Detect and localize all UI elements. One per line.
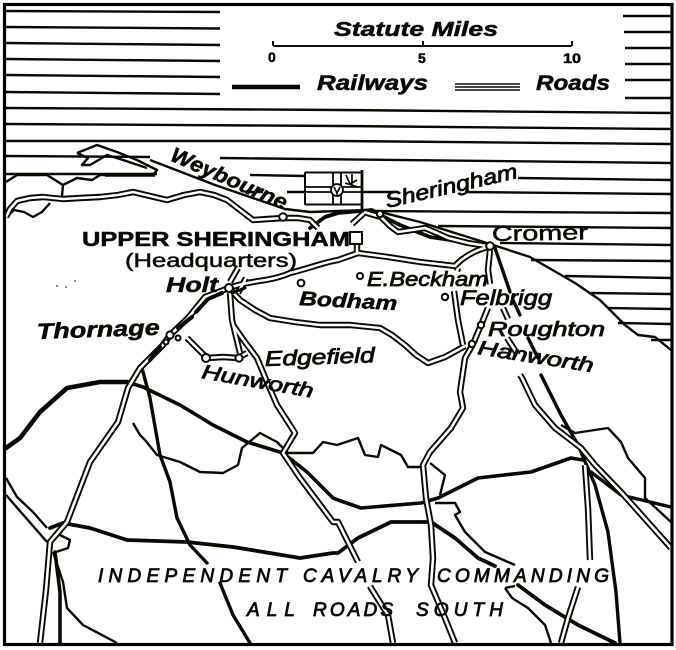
place labels: (Headquarters): [125, 251, 297, 272]
railway alongside Holt and Thornage road: [150, 288, 245, 360]
caption: independent cavalry: SOUTH: [416, 600, 503, 621]
railways: [6, 210, 671, 643]
caption: independent cavalry: ROADS: [313, 600, 393, 621]
specks inland: [56, 280, 76, 288]
place labels: Felbrigg: [460, 287, 552, 310]
caption: independent cavalry: COMMANDING: [437, 566, 609, 587]
place labels: Hunworth: [200, 361, 315, 403]
place labels: UPPER SHERINGHAM: [82, 229, 350, 251]
caption: independent cavalry: CAVALRY: [303, 566, 419, 587]
town markers: [164, 211, 494, 362]
caption: independent cavalry: ALL: [246, 600, 295, 621]
place labels: Weybourne: [167, 143, 291, 215]
place labels: Roughton: [488, 319, 605, 341]
sea hatching: [6, 11, 671, 340]
legend: railways: Railways: [317, 72, 428, 95]
legend: scale bar: [268, 19, 581, 66]
scale numbers: 5: [418, 50, 426, 66]
caption: independent cavalry: INDEPENDENT: [98, 566, 288, 587]
place labels: E.Beckham: [367, 269, 488, 291]
place labels: Edgefield: [264, 344, 377, 371]
coastline and spit: [6, 145, 671, 350]
roads: [6, 192, 671, 643]
scale numbers: 0: [268, 49, 276, 65]
place labels: Cromer: [492, 221, 588, 246]
rivers: [6, 423, 671, 643]
scale numbers: [268, 49, 581, 66]
flag at Sheringham: [305, 170, 362, 212]
caption: independent cavalry: [98, 566, 609, 621]
place labels: Sheringham: [383, 160, 520, 213]
place labels: Bodham: [299, 288, 398, 315]
scale numbers: 10: [563, 50, 581, 66]
legend: roads: [455, 72, 610, 95]
place labels: Hanworth: [476, 337, 595, 377]
place labels: Thornage: [36, 315, 160, 344]
place labels: [36, 143, 605, 403]
legend: roads: Roads: [536, 72, 610, 95]
place labels: Holt: [166, 274, 219, 297]
scale title: Statute Miles: [334, 19, 498, 41]
